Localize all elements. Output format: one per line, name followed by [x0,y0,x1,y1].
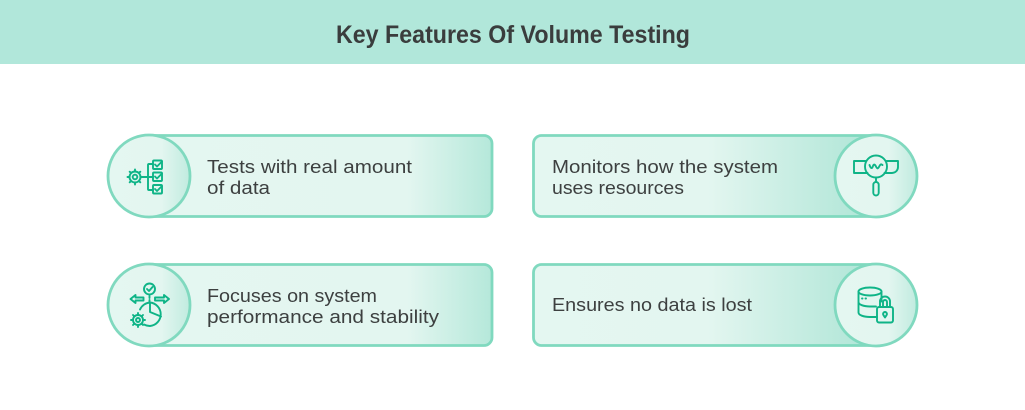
panel: monitors how the system uses resources [534,135,917,217]
text: Monitors how the system [552,157,778,177]
icon: database with padlock [858,288,893,322]
panel: tests with real amount of data: of data [207,178,271,198]
panel: ensures no data is lost [534,264,917,346]
icon: gear with checklist [128,160,162,194]
icon: arrows, pie chart and gear [130,284,169,327]
title: Key Features Of Volume Testing [336,21,690,49]
panel: focuses on system performance and stability [108,264,492,346]
panel: monitors how the system uses resources: uses resources [552,178,684,198]
title banner [0,0,1025,64]
panel: focuses on system performance and stability: performance and stability [207,307,439,327]
text: Focuses on system [207,286,377,306]
text: Tests with real amount [207,157,412,177]
icon: magnifier with wave [854,156,898,196]
text: Ensures no data is lost [552,295,752,315]
panel: tests with real amount of data [108,135,492,217]
